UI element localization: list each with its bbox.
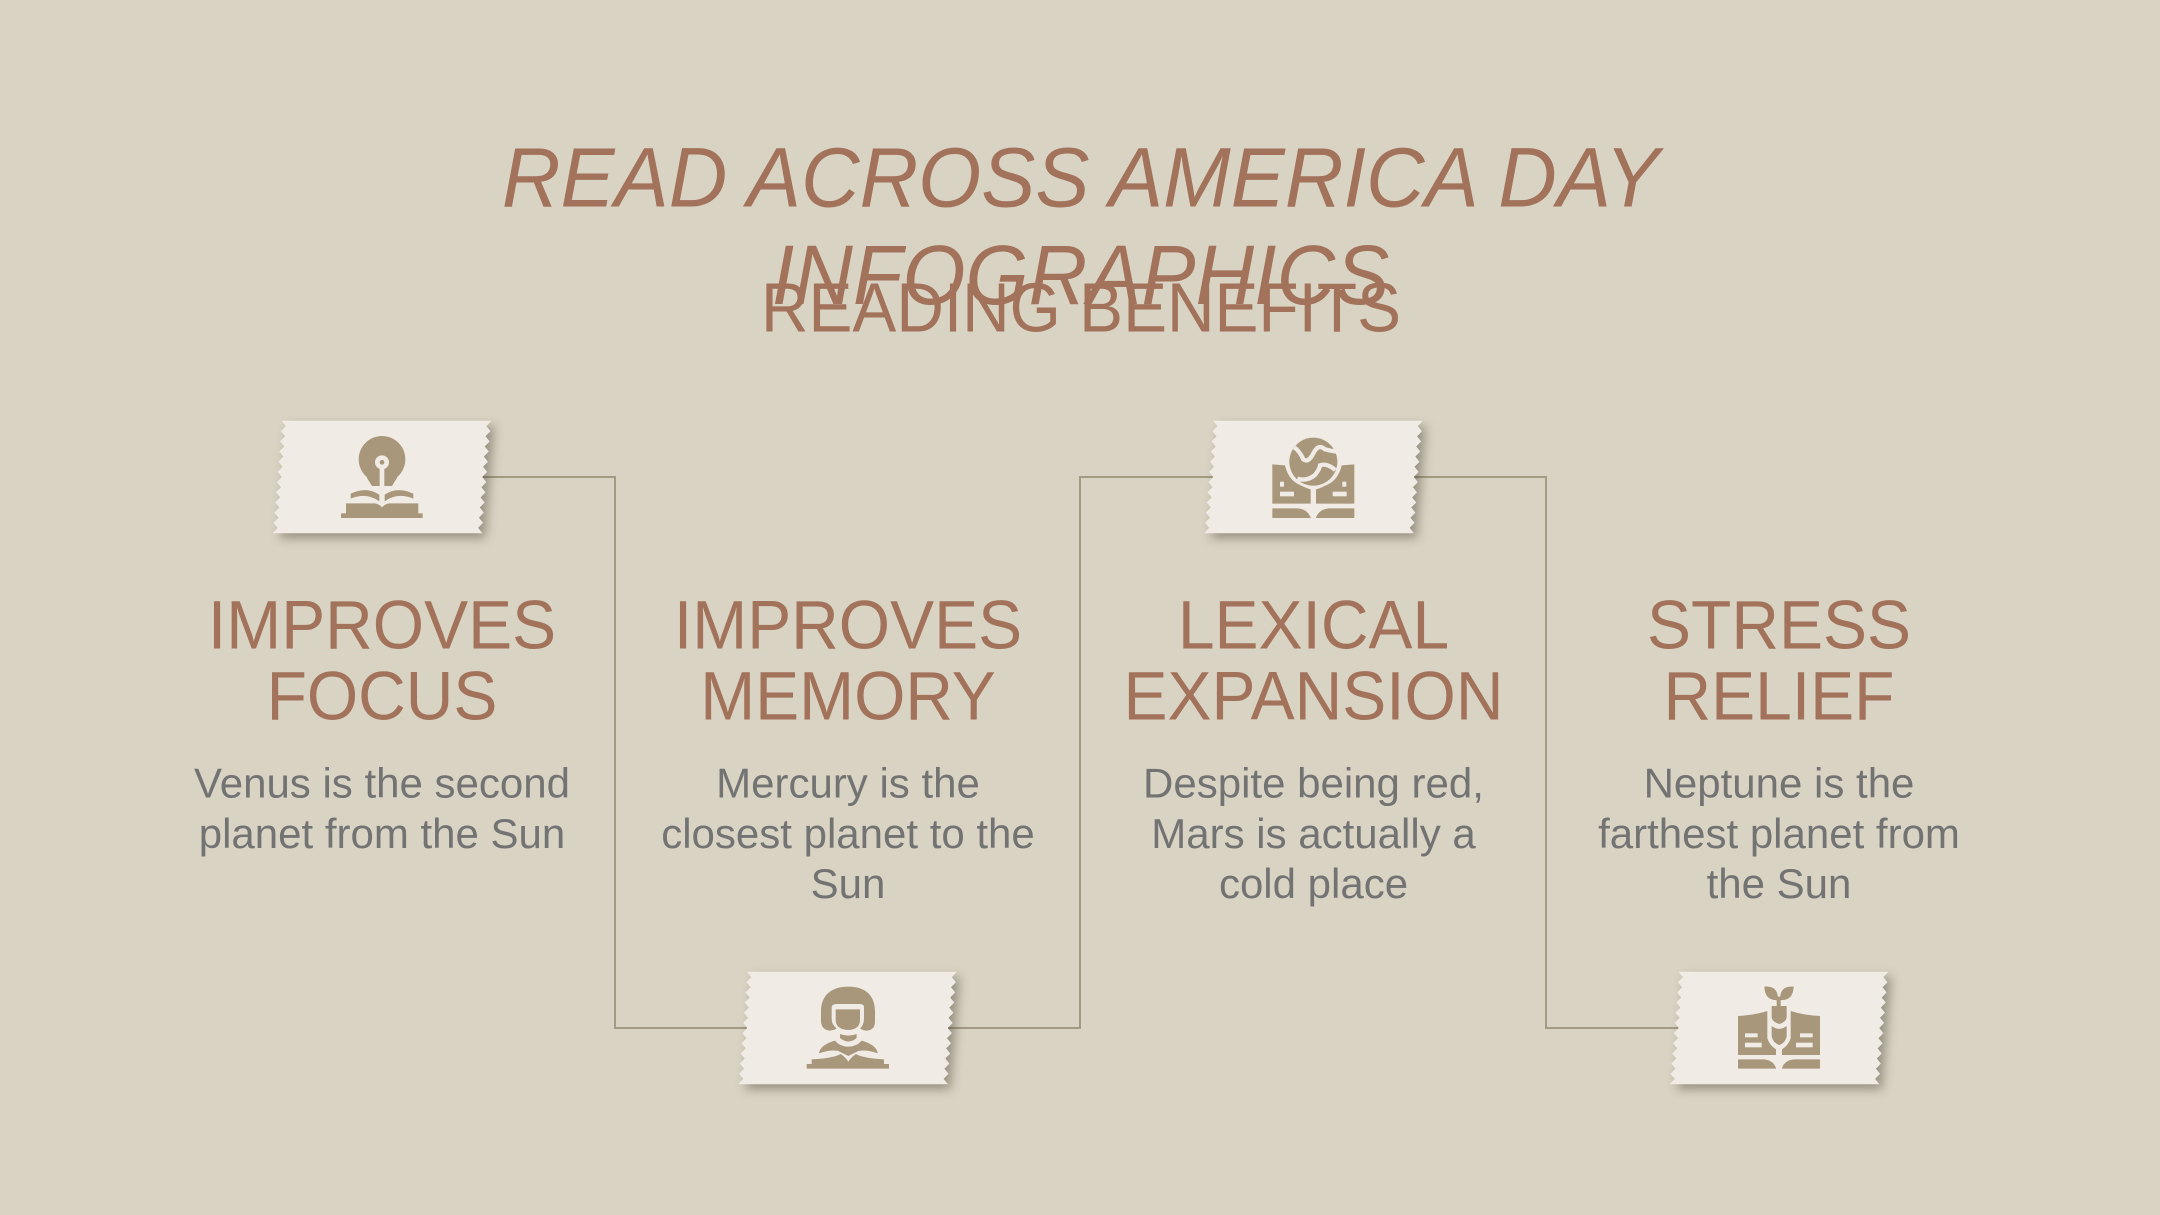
tag: lexical expansion — [1204, 421, 1422, 533]
heading: RELIEF — [1664, 658, 1894, 735]
description: Neptune is the — [1644, 760, 1914, 806]
description: farthest planet from — [1598, 810, 1960, 857]
tag: improves focus — [273, 421, 491, 533]
description: cold place — [1219, 860, 1408, 907]
heading: IMPROVES — [208, 587, 556, 664]
tag: improves memory — [738, 972, 956, 1084]
description: Mars is actually a — [1151, 810, 1476, 857]
title: READ ACROSS AMERICA DAY — [502, 131, 1665, 225]
tag: stress relief — [1670, 972, 1888, 1084]
description: Mercury is the — [716, 760, 980, 806]
heading: MEMORY — [700, 658, 996, 735]
heading: FOCUS — [267, 658, 497, 735]
description: planet from the Sun — [199, 810, 565, 857]
connector line — [480, 477, 1690, 1028]
title: INFOGRAPHICS — [772, 229, 1389, 322]
icon: person reading — [807, 987, 889, 1069]
heading: LEXICAL — [1178, 587, 1449, 664]
icon: plant growing from book — [1738, 987, 1820, 1069]
panel: stress relief — [1598, 587, 1960, 1084]
description: closest planet to the — [661, 810, 1035, 857]
heading: STRESS — [1647, 587, 1911, 664]
panel: improves focus — [194, 421, 570, 857]
description: Venus is the second — [194, 760, 570, 806]
heading: EXPANSION — [1124, 658, 1503, 735]
icon: globe over book — [1272, 438, 1354, 518]
panel: lexical expansion — [1124, 421, 1503, 907]
description: the Sun — [1707, 860, 1851, 907]
subtitle: READING BENEFITS — [761, 270, 1401, 347]
description: Sun — [811, 860, 885, 907]
description: Despite being red, — [1143, 760, 1484, 806]
panel: improves memory — [661, 587, 1035, 1084]
heading: IMPROVES — [674, 587, 1022, 664]
icon: light bulb over book — [341, 436, 423, 518]
